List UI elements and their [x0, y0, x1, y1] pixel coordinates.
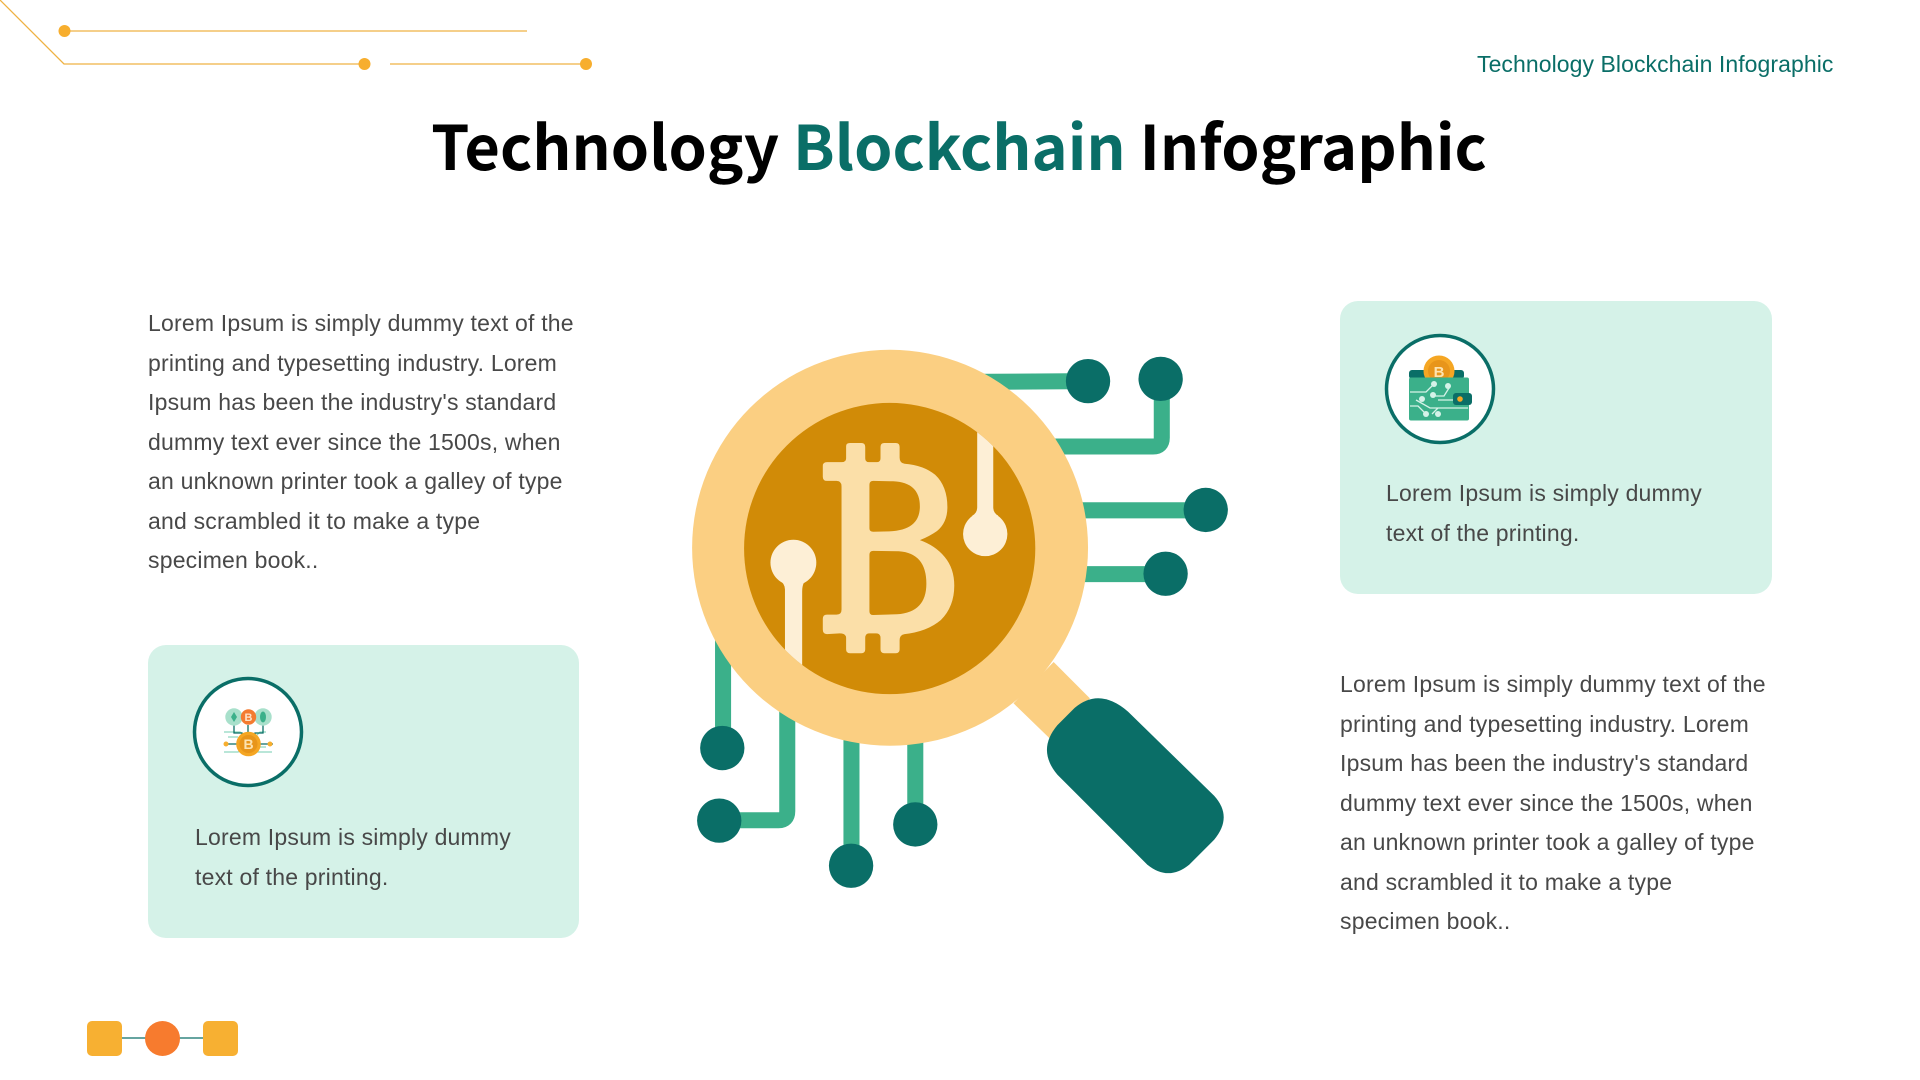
title: Technology Blockchain Infographic [431, 99, 1487, 188]
right paragraph: Lorem Ipsum is simply dummy text of the [1340, 671, 1766, 697]
card text [195, 824, 511, 890]
bitcoin symbol [823, 443, 954, 653]
icon: crypto network [192, 676, 304, 788]
icon: bitcoin wallet [1384, 334, 1496, 444]
right paragraph: Ipsum has been the industry's standard [1340, 750, 1748, 776]
right paragraph: dummy text ever since the 1500s, when [1340, 790, 1753, 816]
icon: crypto network: B [245, 712, 253, 724]
icon: bitcoin wallet: B [1434, 364, 1445, 381]
circuit nodes [697, 357, 1228, 888]
left paragraph: printing and typesetting industry. Lorem [148, 350, 557, 376]
lens [744, 403, 1035, 694]
left paragraph [148, 310, 574, 573]
right paragraph: and scrambled it to make a type [1340, 868, 1672, 894]
lens circuit traces [770, 432, 1008, 665]
card text: text of the printing. [1386, 520, 1579, 546]
card text: Lorem Ipsum is simply dummy [195, 824, 511, 850]
panel: left card [148, 645, 579, 938]
right paragraph: an unknown printer took a galley of type [1340, 829, 1755, 855]
right paragraph [1340, 671, 1766, 934]
left paragraph: and scrambled it to make a type [148, 508, 480, 534]
bottom node decoration [87, 1021, 238, 1056]
left paragraph: Ipsum has been the industry's standard [148, 389, 556, 415]
circuit lines [719, 381, 1206, 866]
icon: crypto network: B [243, 736, 254, 752]
left paragraph: an unknown printer took a galley of type [148, 468, 563, 494]
card text: text of the printing. [195, 864, 388, 890]
magnifier handle [1047, 698, 1224, 873]
magnifier neck [1014, 662, 1090, 738]
header label: Technology Blockchain Infographic [1477, 51, 1833, 77]
right paragraph: printing and typesetting industry. Lorem [1340, 710, 1749, 736]
right paragraph: specimen book.. [1340, 908, 1510, 934]
decorative top-left circuit lines [0, 0, 592, 70]
left paragraph: Lorem Ipsum is simply dummy text of the [148, 310, 574, 336]
magnifier ring [692, 350, 1088, 746]
illustration: magnifying glass over bitcoin with circuit lines [692, 350, 1228, 888]
left paragraph: specimen book.. [148, 547, 318, 573]
card text [1386, 480, 1702, 546]
panel: right card [1340, 301, 1772, 594]
card text: Lorem Ipsum is simply dummy [1386, 480, 1702, 506]
left paragraph: dummy text ever since the 1500s, when [148, 428, 561, 454]
